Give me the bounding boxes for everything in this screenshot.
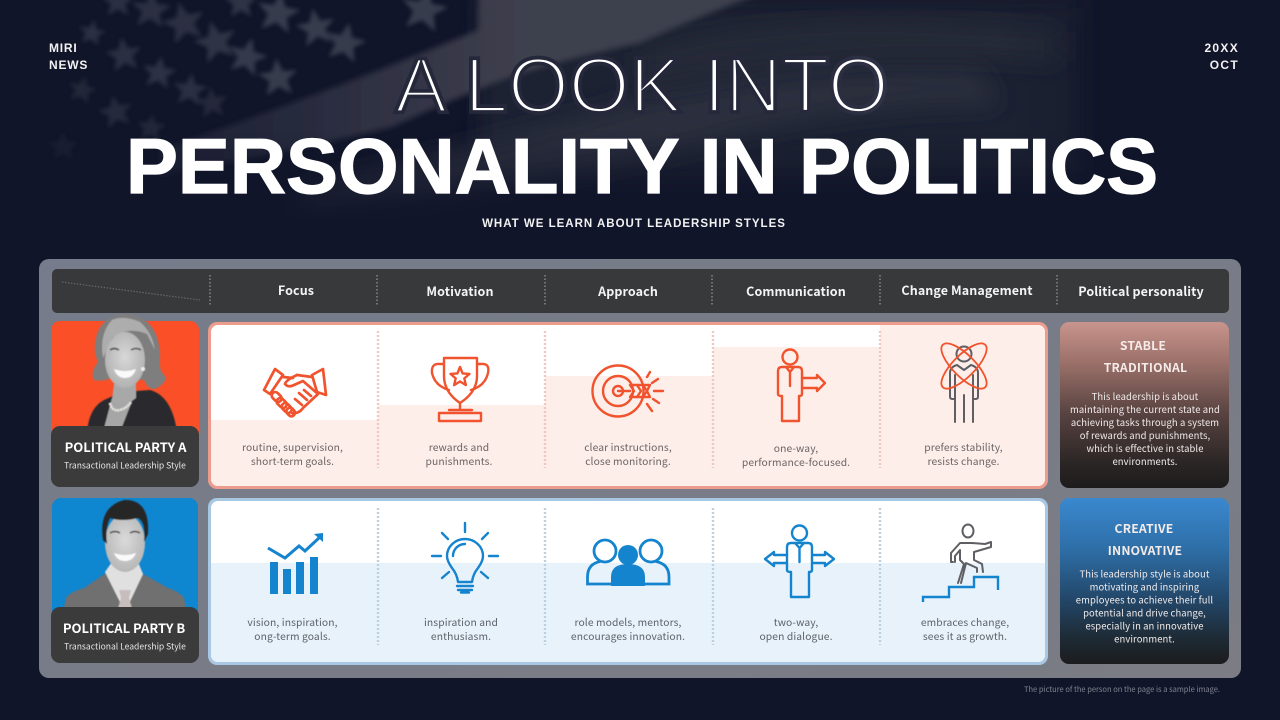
subtitle: WHAT WE LEARN ABOUT LEADERSHIP STYLES [482, 218, 786, 230]
label: party B: Transactional Leadership Style [64, 640, 186, 652]
panel: party B personality: environment. [1114, 632, 1175, 646]
photo: woman portrait [87, 314, 177, 432]
text: party A descriptions: clear instructions, [584, 439, 672, 454]
header bar: Approach [597, 281, 658, 300]
text: party A descriptions: resists change. [927, 453, 1000, 468]
label: party B: POLITICAL PARTY B [63, 618, 185, 637]
header bar: Communication [746, 281, 846, 300]
text: party B descriptions [247, 614, 1009, 643]
panel: party A personality: which is effective in stable [1086, 441, 1204, 455]
panel: party B personality: potential and drive change, [1083, 606, 1206, 620]
icon: bar chart with arrow [268, 533, 323, 594]
panel: party A personality: This leadership is about [1092, 389, 1199, 403]
panel: party B traits [208, 498, 1048, 665]
text: party B descriptions: ong-term goals. [254, 628, 331, 643]
text: party A descriptions: one-way, [774, 440, 818, 455]
icon: handshake [264, 369, 326, 418]
icon: trophy [432, 358, 488, 421]
header bar: Change Management [901, 280, 1033, 299]
panel: party A personality: maintaining the current state and [1070, 402, 1220, 416]
text: party A descriptions: performance-focused. [742, 454, 850, 469]
label: party A: POLITICAL PARTY A [65, 437, 187, 456]
text: party B descriptions: vision, inspiration, [247, 614, 338, 629]
panel: party A personality: of rewards and punishments, [1080, 428, 1211, 442]
date label: OCT [1210, 58, 1239, 72]
title line 2: PERSONALITY IN POLITICS [126, 122, 1158, 210]
panel: party B personality: CREATIVE [1115, 519, 1173, 537]
icon: person one-way arrow [778, 350, 825, 421]
label: party A [51, 426, 199, 487]
text: party A descriptions: close monitoring. [585, 453, 671, 468]
text: party A descriptions [242, 439, 1003, 469]
label: party B [51, 607, 199, 663]
panel: party A personality: environments. [1112, 454, 1178, 468]
text: party A descriptions: punishments. [426, 453, 493, 468]
text: party B descriptions: enthusiasm. [431, 628, 491, 643]
header bar: Focus [278, 280, 314, 299]
date label: 20XX [1204, 41, 1239, 55]
icon: person two-way arrows [765, 526, 834, 597]
panel: party B personality: especially in an innovative [1085, 618, 1204, 632]
title line 1: A LOOK INTO [395, 41, 889, 129]
panel: party A personality: TRADITIONAL [1104, 358, 1187, 376]
icon: target [592, 366, 663, 416]
panel: party B profile [51, 498, 199, 663]
panel: party B personality: INNOVATIVE [1108, 541, 1182, 559]
icon: person in orbit [935, 337, 993, 422]
text: party B descriptions: sees it as growth. [923, 628, 1007, 643]
text: party B descriptions: role models, mentors, [574, 614, 682, 629]
text: party A descriptions: routine, supervision, [242, 439, 343, 454]
icon: person climbing stairs [923, 524, 998, 602]
panel: party A personality: STABLE [1120, 336, 1166, 354]
panel: party A personality [1060, 322, 1229, 488]
icon: light bulb [432, 523, 498, 592]
panel: party B personality: employees to achieve their full [1076, 592, 1213, 606]
header bar: Political personality [1078, 281, 1204, 300]
text: party B descriptions: inspiration and [424, 614, 498, 629]
text: party B descriptions: two-way, [774, 614, 818, 629]
panel: party A traits [208, 322, 1048, 489]
panel: comparison table [39, 259, 1241, 678]
brand label [49, 41, 88, 72]
text: party B descriptions: encourages innovation. [571, 628, 685, 643]
footnote: The picture of the person on the page is a sample image. [1024, 684, 1220, 695]
header bar [52, 269, 1229, 313]
text: party B descriptions: open dialogue. [759, 628, 833, 643]
text: party A descriptions: prefers stability, [924, 439, 1003, 454]
photo: man portrait [63, 500, 187, 612]
date label [1204, 41, 1239, 72]
text: party A descriptions: rewards and [429, 439, 489, 454]
panel: party B personality: This leadership style is about [1080, 566, 1210, 580]
brand label: NEWS [49, 58, 88, 72]
panel: party B personality: motivating and inspiring [1090, 580, 1200, 594]
text: party A descriptions: short-term goals. [251, 453, 334, 468]
text: party B descriptions: embraces change, [921, 614, 1009, 629]
brand label: MIRI [49, 41, 78, 55]
icon: group of people [588, 540, 669, 586]
label: party A: Transactional Leadership Style [64, 460, 186, 472]
panel: party B personality [1060, 498, 1229, 664]
header bar: Motivation [426, 281, 494, 300]
panel: party A profile [51, 314, 199, 487]
panel: party A personality: achieving tasks through a system [1071, 415, 1219, 429]
